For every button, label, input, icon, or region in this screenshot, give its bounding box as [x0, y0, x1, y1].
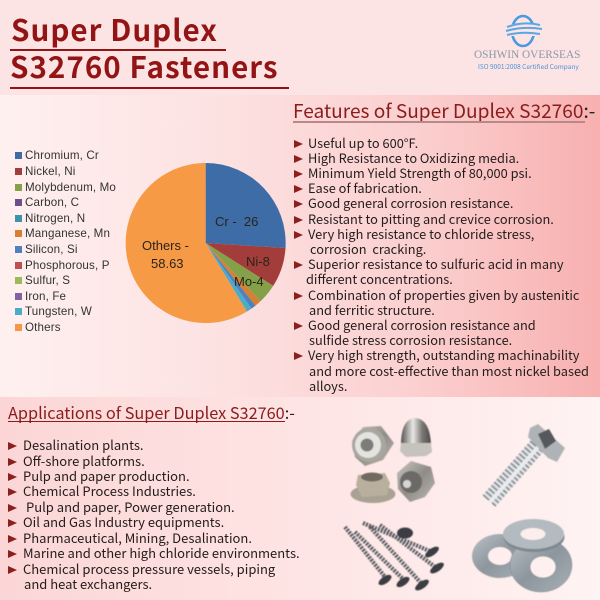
legend: element list: Nickel, Ni — [25, 165, 75, 178]
heading: applications: Applications of Super Duplex S32760:- — [8, 400, 295, 424]
wedge: Others — [126, 163, 247, 323]
list: features: Very high resistance to chloride stress, — [308, 224, 534, 243]
list: applications: Chemical Process Industries. — [23, 481, 196, 500]
legend: element list: Others — [25, 321, 61, 334]
icon: hex bolt — [489, 424, 565, 502]
list: features: and more cost-effective than most nickel based — [309, 361, 589, 380]
panel: header — [0, 0, 600, 95]
list: features: Useful up to 600°F. — [308, 133, 418, 152]
heading: features: Features of Super Duplex S32760:- — [293, 96, 595, 124]
legend: element list: Manganese, Mn — [25, 227, 110, 240]
list: features: Very high strength, outstanding machinability — [308, 345, 579, 364]
list: features — [294, 133, 589, 395]
list: features: different concentrations. — [306, 269, 453, 288]
list: features: Good general corrosion resistance. — [308, 193, 513, 212]
list: features: Resistant to pitting and crevice corrosion. — [308, 209, 554, 228]
icon: washers — [472, 519, 572, 592]
logo: Oshwin Overseas — [474, 14, 580, 71]
legend: element list: Silicon, Si — [25, 243, 78, 256]
wedge: Nickel — [206, 243, 286, 286]
title — [10, 7, 289, 89]
pie labels: Others - — [142, 238, 189, 253]
icon: logo globe — [506, 14, 542, 48]
list: applications: Desalination plants. — [23, 435, 144, 454]
pie labels — [142, 214, 270, 289]
list: features: sulfide stress corrosion resistance. — [309, 330, 512, 349]
wedge: Silicon — [206, 243, 256, 309]
wedge: Chromium — [206, 163, 286, 248]
logo certification: ISO 9001:2008 Certified Company — [478, 61, 579, 71]
panel: applications background — [0, 397, 600, 600]
pie labels: Cr - 26 — [215, 214, 258, 229]
logo name: OSHWIN OVERSEAS — [474, 49, 580, 61]
list: features: alloys. — [309, 376, 347, 395]
list: applications: and heat exchangers. — [24, 574, 152, 593]
list: features: Superior resistance to sulfuric acid in many — [308, 254, 564, 273]
legend: element list: Tungsten, W — [25, 305, 92, 318]
list: features: corrosion cracking. — [310, 239, 426, 258]
wedge: Manganese — [206, 243, 260, 306]
pie chart — [126, 163, 286, 323]
list: applications: Pharmaceutical, Mining, Desalination. — [23, 528, 252, 547]
panel: composition and features background — [0, 95, 600, 397]
legend: element list: Nitrogen, N — [25, 212, 85, 225]
icon: screws — [345, 523, 446, 592]
list: features: and ferritic structure. — [309, 300, 435, 319]
legend: element list: Carbon, C — [25, 196, 79, 209]
list: features: Good general corrosion resistance and — [308, 315, 536, 334]
pie labels: Ni-8 — [246, 254, 270, 269]
legend: element list: Chromium, Cr — [25, 149, 99, 162]
title: S32760 Fasteners — [10, 44, 279, 87]
list: applications: Marine and other high chloride environments. — [23, 543, 300, 562]
legend: element list: Iron, Fe — [25, 290, 66, 303]
list: applications — [8, 435, 300, 593]
list: applications: Off-shore platforms. — [23, 451, 145, 470]
list: features: High Resistance to Oxidizing media. — [308, 148, 519, 167]
list: applications: Pulp and paper, Power generation. — [26, 497, 235, 516]
fastener photos — [343, 418, 573, 593]
wedge: Tungsten — [206, 243, 252, 312]
legend: element list: Molybdenum, Mo — [25, 181, 116, 194]
pie labels: Mo-4 — [234, 274, 264, 289]
pie labels: 58.63 — [151, 256, 184, 271]
list: applications: Oil and Gas Industry equipments. — [23, 512, 224, 531]
list: features: Combination of properties given by austenitic — [308, 285, 579, 304]
title: Super Duplex — [11, 7, 218, 50]
legend: element list: Sulfur, S — [25, 274, 70, 287]
list: features: Minimum Yield Strength of 80,000 psi. — [308, 163, 532, 182]
wedge: Molybdenum — [206, 243, 273, 301]
list: applications: Chemical process pressure vessels, piping — [23, 559, 275, 578]
list: applications: Pulp and paper production. — [23, 466, 190, 485]
legend: element list: Phosphorous, P — [25, 259, 110, 272]
legend: element list — [15, 149, 116, 334]
list: features: Ease of fabrication. — [308, 178, 422, 197]
icon: nuts — [350, 418, 435, 503]
